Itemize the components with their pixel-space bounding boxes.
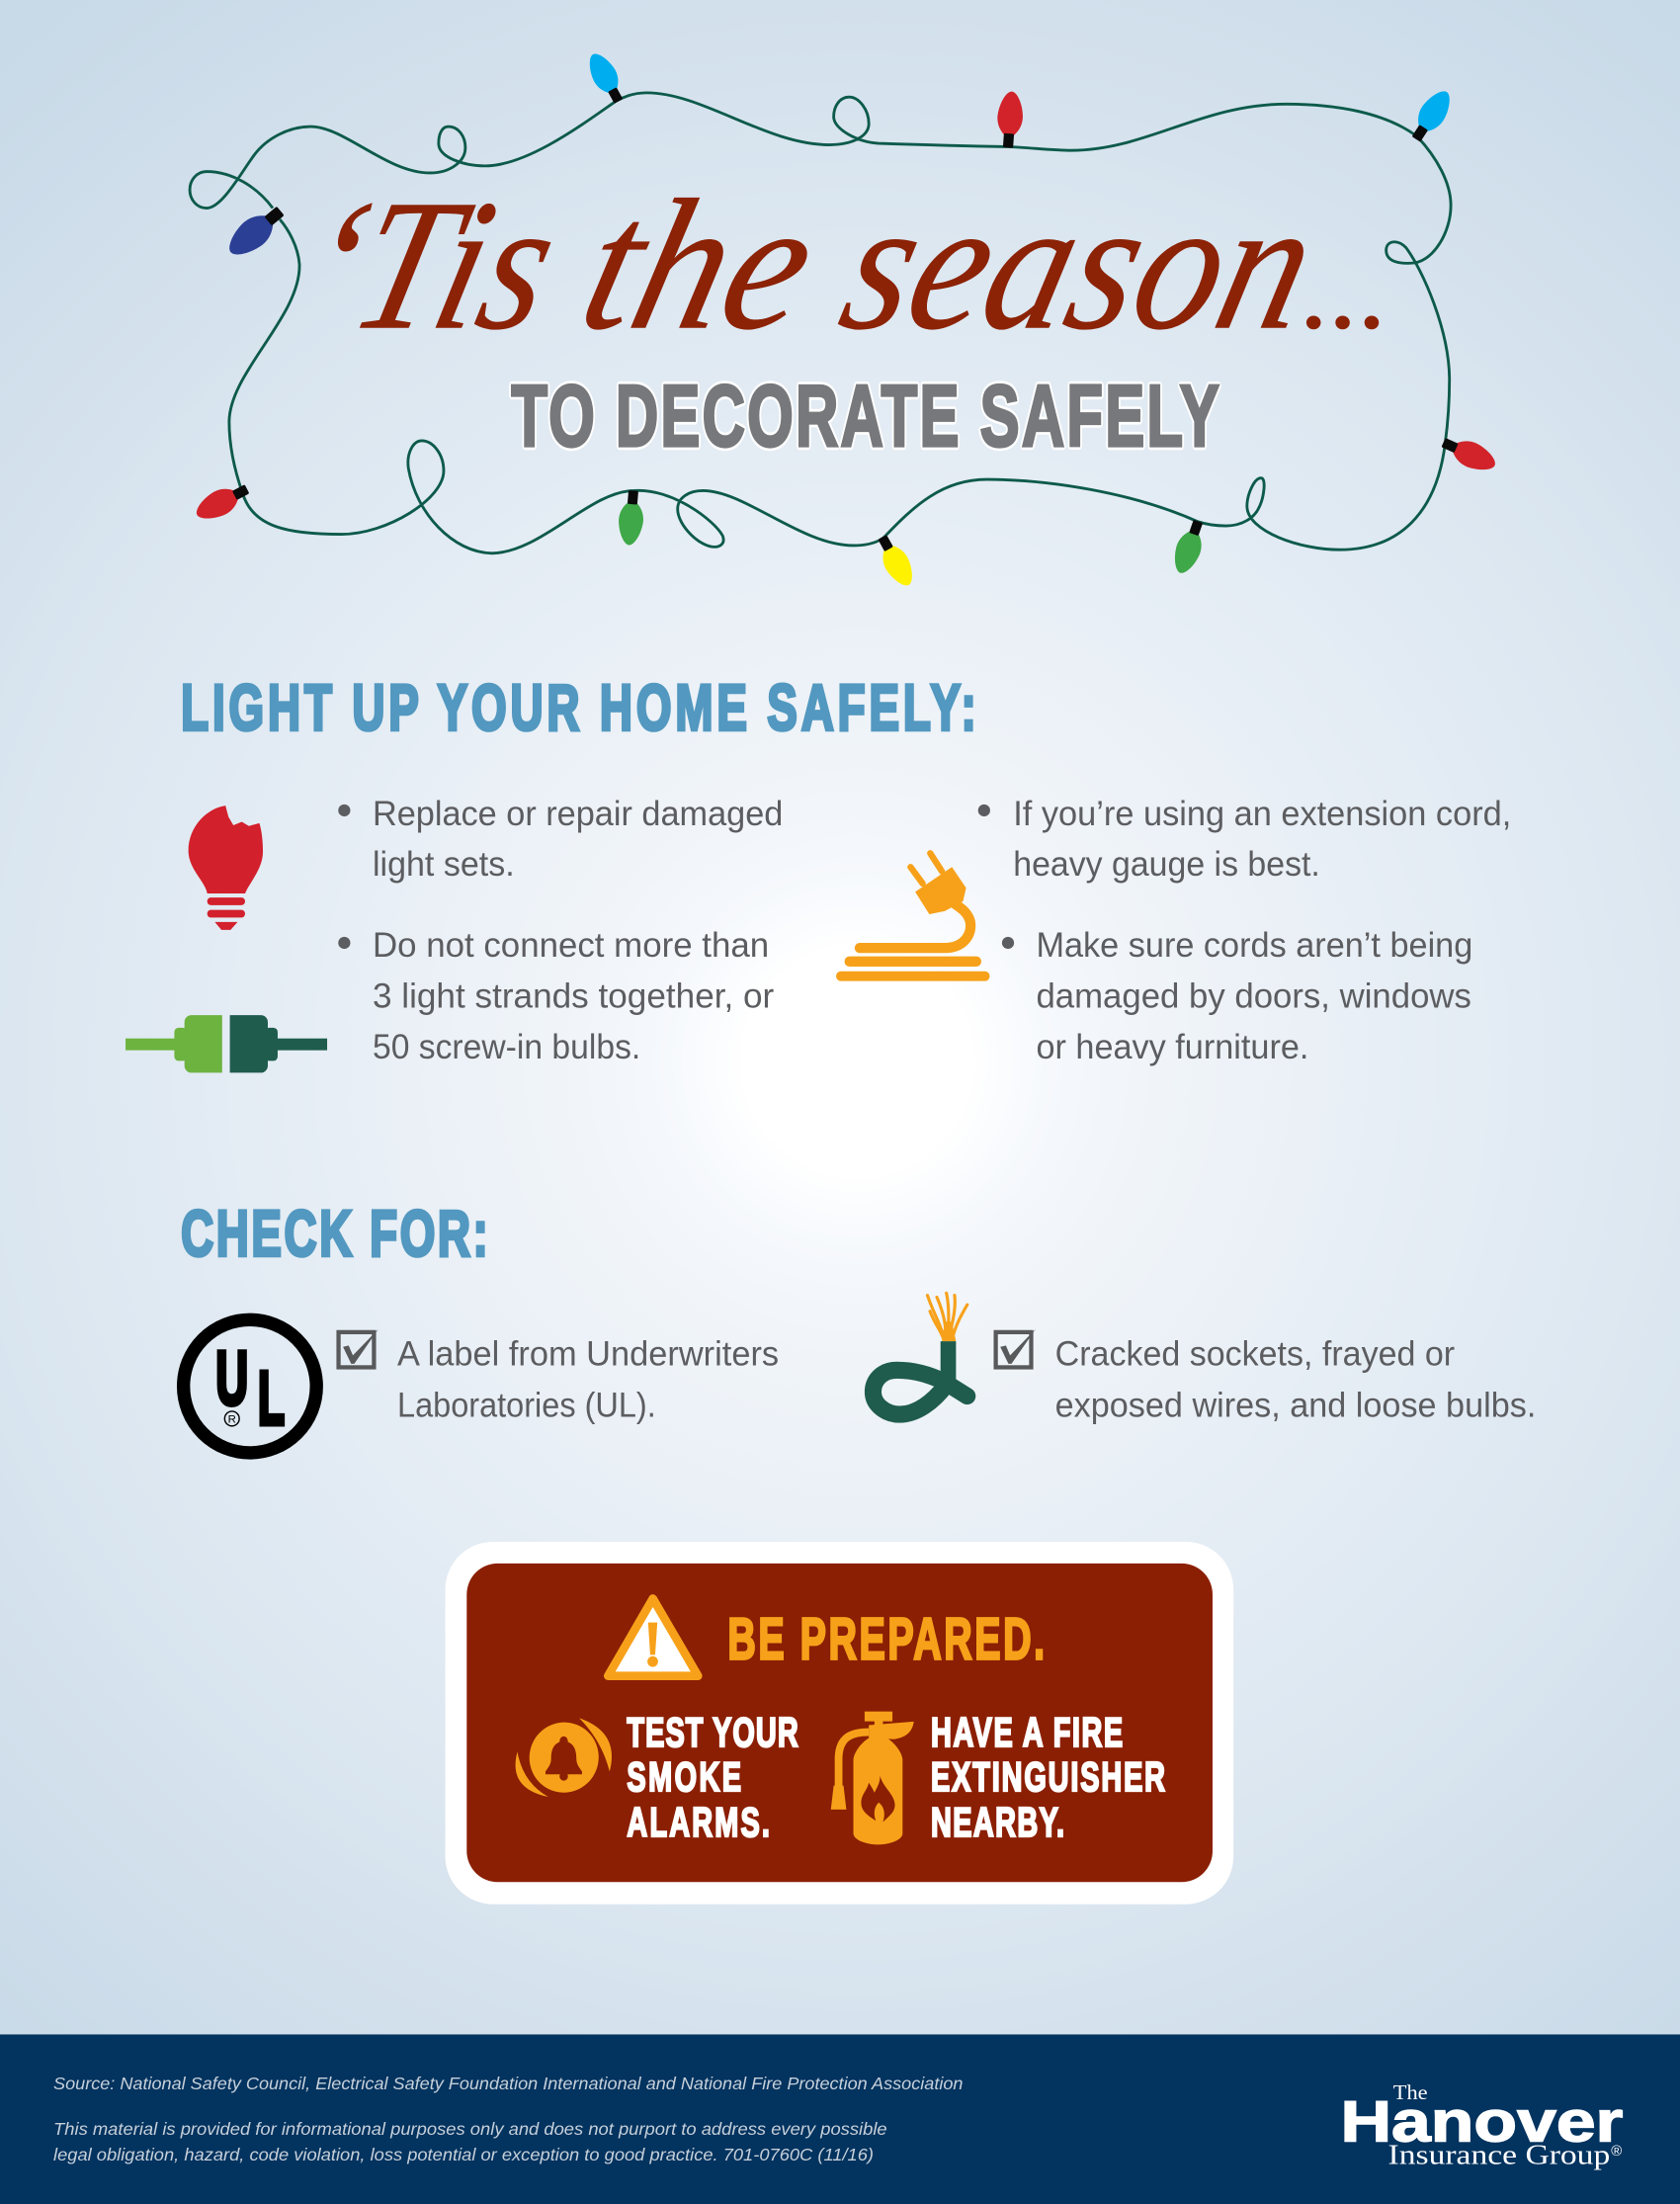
text: test your smoke alarms bbox=[627, 1710, 798, 1845]
icon: warning triangle bbox=[608, 1598, 698, 1676]
check item: frayed wires: Cracked sockets, frayed or bbox=[1055, 1333, 1455, 1373]
icon: extension cord bbox=[836, 853, 990, 981]
icon: checkbox bbox=[996, 1329, 1036, 1367]
bulb: blue left bbox=[221, 200, 290, 264]
bulb: yellow bottom bbox=[872, 532, 919, 591]
text: have a fire extinguisher nearby: NEARBY. bbox=[931, 1800, 1064, 1845]
bulb: cyan right bbox=[1405, 85, 1458, 146]
bullet: cord damage: or heavy furniture. bbox=[1036, 1027, 1308, 1066]
subtitle: to decorate safely: TO DECORATE SAFELY bbox=[511, 367, 1219, 465]
light string wire bbox=[190, 93, 1451, 553]
bullet: limit light strands: Do not connect more than bbox=[373, 925, 769, 965]
icon: frayed wire bbox=[873, 1293, 967, 1414]
icon: UL logo: L bbox=[258, 1356, 285, 1441]
text: test your smoke alarms: SMOKE bbox=[627, 1754, 741, 1800]
logo: The Hanover Insurance Group: Hanover bbox=[1340, 2090, 1623, 2155]
panel: be prepared bbox=[446, 1542, 1233, 1905]
text: test your smoke alarms: ALARMS. bbox=[627, 1800, 770, 1845]
check item: UL label bbox=[339, 1329, 779, 1424]
source note: Source: National Safety Council, Electrical Safety Foundation International and National Fire Protection Association bbox=[53, 2074, 964, 2093]
logo: The Hanover Insurance Group: ® bbox=[1611, 2143, 1622, 2160]
text: test your smoke alarms: TEST YOUR bbox=[627, 1710, 798, 1755]
check item: UL label: Laboratories (UL). bbox=[397, 1385, 656, 1424]
icon: UL logo bbox=[184, 1319, 316, 1453]
icon: checkbox bbox=[339, 1329, 378, 1367]
bullet list: left column bbox=[338, 794, 783, 1066]
text: have a fire extinguisher nearby: HAVE A FIRE bbox=[931, 1710, 1123, 1755]
heading: be prepared: BE PREPARED. bbox=[727, 1605, 1045, 1672]
bullet: limit light strands: 3 light strands together, or bbox=[373, 975, 774, 1015]
text: have a fire extinguisher nearby bbox=[931, 1710, 1165, 1845]
disclaimer: legal obligation, hazard, code violation, loss potential or exception to good practice. 701-0760C (11/16) bbox=[53, 2145, 874, 2164]
bulb: red top bbox=[995, 91, 1025, 148]
title: 'Tis the season... bbox=[283, 161, 1389, 369]
bullet: extension cord gauge bbox=[978, 794, 1511, 884]
bulb: red right bbox=[1438, 431, 1500, 477]
logo: The Hanover Insurance Group: The bbox=[1393, 2082, 1428, 2104]
bullet: limit light strands bbox=[338, 925, 774, 1066]
bullet: replace damaged lights: Replace or repair damaged bbox=[373, 794, 783, 833]
bullet: limit light strands: 50 screw-in bulbs. bbox=[373, 1027, 640, 1066]
bulb: red left bbox=[192, 477, 253, 526]
disclaimer: This material is provided for informational purposes only and does not purport to address every possible bbox=[53, 2119, 887, 2139]
bulb: green bottom bbox=[617, 489, 645, 547]
icon: UL logo: R bbox=[228, 1414, 236, 1426]
icon: unplugged connector bbox=[126, 1015, 327, 1072]
check item: frayed wires bbox=[996, 1329, 1536, 1424]
bullet: cord damage bbox=[1002, 925, 1472, 1066]
check item: UL label: A label from Underwriters bbox=[397, 1333, 779, 1373]
title: 'Tis the season...: the bbox=[565, 161, 834, 369]
icon: UL logo: U bbox=[215, 1336, 248, 1421]
logo: The Hanover Insurance Group: Insurance Group bbox=[1388, 2140, 1610, 2170]
title: 'Tis the season...: season bbox=[825, 161, 1335, 369]
text: have a fire extinguisher nearby: EXTINGUISHER bbox=[931, 1754, 1165, 1800]
disclaimer bbox=[53, 2119, 887, 2164]
title: 'Tis the season...: ‘Tis bbox=[283, 161, 576, 369]
subtitle: to decorate safely: TO DECORATE SAFELY bbox=[511, 367, 1219, 465]
title: 'Tis the season...: ... bbox=[1302, 230, 1389, 352]
icon: alarm bell bbox=[516, 1715, 612, 1801]
bullet: extension cord gauge: heavy gauge is best. bbox=[1013, 844, 1320, 884]
bullet: replace damaged lights: light sets. bbox=[373, 844, 515, 884]
string of holiday lights bbox=[190, 48, 1500, 591]
bulb: cyan top bbox=[582, 48, 630, 107]
bullet: cord damage: Make sure cords aren’t being bbox=[1036, 925, 1472, 965]
check item: frayed wires: exposed wires, and loose bulbs. bbox=[1055, 1385, 1536, 1424]
bulb: green right bbox=[1169, 517, 1210, 577]
icon: broken light bulb bbox=[189, 805, 263, 930]
icon: fire extinguisher bbox=[831, 1712, 914, 1844]
bullet list: right column bbox=[978, 794, 1511, 1066]
logo: The Hanover Insurance Group bbox=[1340, 2082, 1623, 2170]
bullet: replace damaged lights bbox=[338, 794, 783, 884]
heading: check for: CHECK FOR: bbox=[181, 1197, 488, 1269]
bullet: cord damage: damaged by doors, windows bbox=[1036, 975, 1471, 1015]
bullet: extension cord gauge: If you’re using an extension cord, bbox=[1013, 794, 1511, 833]
heading: light up your home safely: LIGHT UP YOUR HOME SAFELY: bbox=[181, 671, 976, 743]
footer band bbox=[0, 2034, 1680, 2204]
